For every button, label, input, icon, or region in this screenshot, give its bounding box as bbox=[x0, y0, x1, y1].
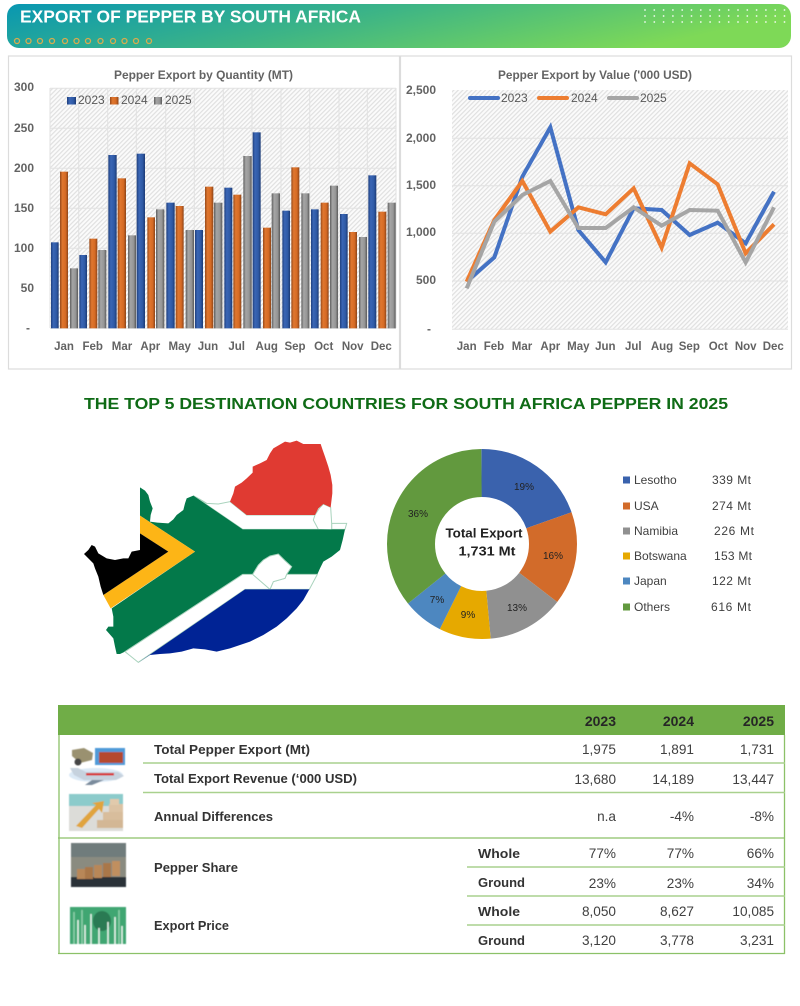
x axis labels: Dec bbox=[763, 341, 784, 353]
title: EXPORT OF PEPPER BY SOUTH AFRICA bbox=[20, 6, 361, 26]
row group: pepper share: Whole bbox=[478, 847, 520, 861]
row: annual differences: -4% bbox=[670, 809, 694, 824]
x axis labels: Mar bbox=[512, 341, 533, 353]
row group: export price bbox=[154, 904, 774, 948]
table header row bbox=[58, 705, 785, 735]
line: 2025 bbox=[467, 181, 774, 288]
row group: pepper share: 66% bbox=[747, 846, 774, 861]
x axis labels: Oct bbox=[709, 341, 728, 353]
donut legend: 616 Mt bbox=[711, 600, 752, 614]
row group: export price: 8,627 bbox=[660, 904, 694, 919]
y axis labels bbox=[14, 80, 34, 335]
x axis labels: Nov bbox=[342, 341, 364, 353]
row group: export price: Ground bbox=[478, 934, 525, 948]
row group: pepper share: 23% bbox=[667, 876, 694, 891]
table header row: 2025 bbox=[743, 713, 774, 729]
y axis labels: 50 bbox=[21, 281, 34, 295]
line: 2023 bbox=[467, 127, 774, 282]
x axis labels: Aug bbox=[651, 341, 673, 353]
row: total export revenue: Total Export Revenue (‘000 USD) bbox=[154, 772, 357, 786]
x axis labels: Jun bbox=[595, 341, 616, 353]
x axis labels: Jul bbox=[625, 341, 642, 353]
chart title: Pepper Export by Value ('000 USD) bbox=[498, 70, 692, 82]
row group: export price: 8,050 bbox=[582, 904, 616, 919]
x axis labels: Sep bbox=[284, 341, 306, 353]
donut slice labels: 7% bbox=[430, 595, 444, 606]
y axis labels: - bbox=[427, 322, 431, 336]
map: South Africa in flag colours bbox=[84, 441, 347, 663]
row: annual differences bbox=[154, 809, 774, 824]
x axis labels: Sep bbox=[679, 341, 700, 353]
icon: rising blocks with arrow bbox=[69, 794, 123, 831]
legend: 2025 bbox=[165, 93, 192, 107]
legend bbox=[67, 93, 192, 107]
y axis labels: - bbox=[26, 321, 30, 335]
legend: 2023 bbox=[501, 91, 528, 105]
row group: pepper share: 77% bbox=[667, 846, 694, 861]
row group: export price: 3,120 bbox=[582, 933, 616, 948]
bars: 2023 series bbox=[51, 132, 376, 328]
row: total pepper export: 1,975 bbox=[582, 742, 616, 757]
donut legend: Namibia bbox=[634, 524, 678, 538]
x axis labels: Apr bbox=[140, 341, 161, 353]
y axis labels: 150 bbox=[14, 201, 34, 215]
row: annual differences: n.a bbox=[597, 809, 616, 824]
donut legend: Botswana bbox=[634, 549, 687, 563]
row group: export price: 10,085 bbox=[732, 904, 774, 919]
x axis labels: Jan bbox=[54, 341, 74, 353]
donut chart bbox=[408, 473, 563, 621]
decorative ring row bbox=[14, 38, 152, 44]
y axis labels: 100 bbox=[14, 241, 34, 255]
header banner bbox=[7, 4, 791, 48]
donut legend: Others bbox=[634, 600, 670, 614]
x axis labels: Jul bbox=[228, 341, 245, 353]
table header row: 2024 bbox=[663, 713, 694, 729]
row: total export revenue bbox=[154, 772, 774, 787]
row group: export price: 3,231 bbox=[740, 933, 774, 948]
y axis labels: 200 bbox=[14, 161, 34, 175]
x axis labels bbox=[457, 341, 784, 353]
row: total export revenue: 13,680 bbox=[574, 772, 616, 787]
legend: 2024 bbox=[121, 93, 148, 107]
icon: green price arrows bbox=[70, 907, 126, 944]
row: total export revenue: 14,189 bbox=[652, 772, 694, 787]
donut legend: 274 Mt bbox=[712, 499, 752, 513]
legend: 2025 bbox=[640, 91, 667, 105]
y axis labels: 1,000 bbox=[406, 225, 436, 239]
x axis labels: Oct bbox=[314, 341, 333, 353]
x axis labels: Feb bbox=[82, 341, 103, 353]
legend: 2023 bbox=[78, 93, 105, 107]
donut legend: 339 Mt bbox=[712, 473, 752, 487]
row: annual differences: -8% bbox=[750, 809, 774, 824]
row group: pepper share: Pepper Share bbox=[154, 861, 238, 875]
x axis labels: Mar bbox=[112, 341, 133, 353]
x axis labels: Aug bbox=[256, 341, 278, 353]
y axis labels: 1,500 bbox=[406, 178, 436, 192]
donut legend: Lesotho bbox=[634, 473, 677, 487]
line: 2024 bbox=[467, 163, 774, 282]
table header row: 2023 bbox=[585, 713, 616, 729]
icon: shares blocks photo bbox=[71, 843, 126, 887]
row group: export price: Whole bbox=[478, 905, 520, 919]
row group: export price: Export Price bbox=[154, 919, 229, 933]
x axis labels: Dec bbox=[371, 341, 392, 353]
donut legend: 122 Mt bbox=[712, 574, 752, 588]
legend: 2024 bbox=[571, 91, 598, 105]
row group: pepper share: Ground bbox=[478, 876, 525, 890]
donut centre total: Total Export bbox=[446, 526, 523, 540]
donut slice labels: 36% bbox=[408, 509, 428, 520]
row: total pepper export bbox=[154, 742, 774, 757]
row: annual differences: Annual Differences bbox=[154, 810, 273, 824]
icon: export cargo and plane bbox=[69, 748, 125, 785]
donut legend: USA bbox=[634, 499, 659, 513]
donut legend: Japan bbox=[634, 574, 667, 588]
y axis labels bbox=[406, 83, 436, 336]
x axis labels: Feb bbox=[484, 341, 504, 353]
y axis labels: 300 bbox=[14, 80, 34, 94]
x axis labels: Apr bbox=[540, 341, 561, 353]
bars: 2024 series bbox=[60, 167, 386, 328]
bars: 2025 series bbox=[70, 156, 396, 328]
bars bbox=[51, 132, 396, 328]
x axis labels bbox=[54, 341, 392, 353]
donut legend bbox=[623, 473, 755, 614]
section heading: THE TOP 5 DESTINATION COUNTRIES FOR SOUTH AFRICA PEPPER IN 2025 bbox=[84, 396, 728, 413]
donut slice labels: 13% bbox=[507, 603, 527, 614]
row: total pepper export: 1,891 bbox=[660, 742, 694, 757]
donut slice labels: 19% bbox=[514, 482, 534, 493]
x axis labels: Jan bbox=[457, 341, 477, 353]
x axis labels: May bbox=[567, 341, 590, 353]
chart title: Pepper Export by Quantity (MT) bbox=[114, 70, 293, 82]
y axis labels: 250 bbox=[14, 121, 34, 135]
donut centre total bbox=[446, 526, 523, 558]
y axis labels: 500 bbox=[416, 273, 436, 287]
x axis labels: Nov bbox=[735, 341, 757, 353]
donut slice labels bbox=[408, 482, 563, 621]
donut slice labels: 16% bbox=[543, 551, 563, 562]
donut legend: 153 Mt bbox=[714, 549, 753, 563]
donut slice labels: 9% bbox=[461, 610, 475, 621]
row group: pepper share: 34% bbox=[747, 876, 774, 891]
lines bbox=[467, 127, 774, 288]
donut legend: 226 Mt bbox=[714, 524, 755, 538]
row group: pepper share: 77% bbox=[589, 846, 616, 861]
row group: pepper share bbox=[154, 846, 774, 891]
summary table bbox=[58, 705, 785, 954]
x axis labels: May bbox=[169, 341, 191, 353]
row: total pepper export: Total Pepper Export (Mt) bbox=[154, 743, 310, 757]
decorative dot grid bbox=[644, 9, 785, 23]
donut centre total: 1,731 Mt bbox=[458, 544, 516, 558]
y axis labels: 2,000 bbox=[406, 131, 436, 145]
y axis labels: 2,500 bbox=[406, 83, 436, 97]
x axis labels: Jun bbox=[198, 341, 218, 353]
row: total pepper export: 1,731 bbox=[740, 742, 774, 757]
row group: export price: 3,778 bbox=[660, 933, 694, 948]
panel: line chart, export by value bbox=[400, 56, 792, 369]
row group: pepper share: 23% bbox=[589, 876, 616, 891]
legend bbox=[468, 91, 667, 105]
panel: bar chart, export by quantity bbox=[8, 56, 400, 369]
row: total export revenue: 13,447 bbox=[732, 772, 774, 787]
